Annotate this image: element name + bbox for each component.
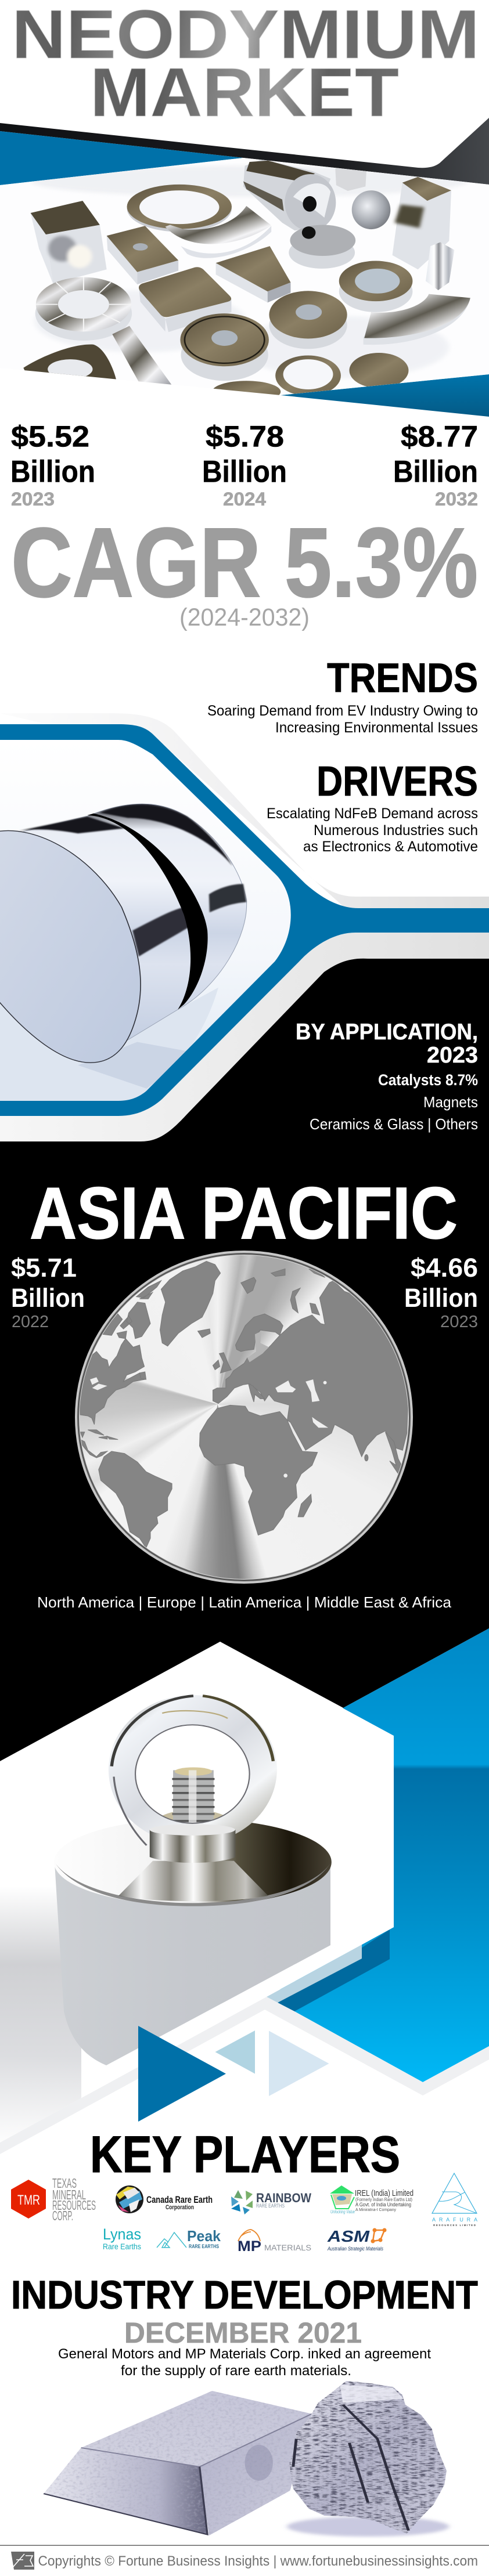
logo: Texas Mineral Resources <box>11 2176 96 2223</box>
collar reflection <box>118 1861 268 1901</box>
stat: 2024: Billion <box>202 455 287 489</box>
logo: Arafura: ARAFURA <box>432 2217 477 2223</box>
logo: Texas Mineral Resources: RESOURCES <box>52 2198 96 2213</box>
date: DECEMBER 2021 <box>124 2317 362 2349</box>
Franz Josef Land <box>271 1269 285 1276</box>
stat: 2024 <box>202 420 287 510</box>
development text: General Motors and MP Materials Corp. inked an agreement <box>58 2346 431 2362</box>
title: MARKET <box>90 54 399 131</box>
trapezoid magnet <box>216 246 290 302</box>
stat: 2024: 2024 <box>223 489 266 510</box>
threaded bolt <box>172 1768 214 1829</box>
blue ribbon <box>0 724 489 1116</box>
dark swoosh band <box>0 118 489 185</box>
big flat ring <box>127 185 232 232</box>
UK and Ireland <box>213 1353 231 1373</box>
logo: Rainbow Rare Earths: RAINBOW <box>256 2191 311 2205</box>
logo: Texas Mineral Resources: TMR <box>17 2192 40 2208</box>
by application text: Catalysts 8.7% <box>378 1071 478 1089</box>
thin ring <box>275 355 341 396</box>
floor shadow <box>0 1886 81 2147</box>
stat: 2022: Billion <box>11 1283 85 1313</box>
flat disc <box>349 353 408 388</box>
title <box>12 0 480 131</box>
other regions: North America | Europe | Latin America | Middle East & Africa <box>37 1594 452 1611</box>
logo: Canada Rare Earth: Corporation <box>166 2204 194 2211</box>
disc with hole <box>289 225 355 269</box>
Italy <box>249 1383 265 1402</box>
drivers text: as Electronics & Automotive <box>303 839 478 855</box>
cylinder magnet photo panel <box>0 740 308 1103</box>
by application text: 2023 <box>427 1043 478 1068</box>
footer logo <box>11 2552 34 2570</box>
by application text: BY APPLICATION, <box>296 1020 478 1045</box>
sphere <box>352 190 390 229</box>
cube magnet <box>31 201 107 284</box>
Novaya Zemlya <box>290 1288 300 1313</box>
eye-bolt magnet photo <box>0 1695 332 2147</box>
top reflective disc <box>54 1819 332 1906</box>
blue wedge bottom-right <box>281 374 489 417</box>
Baltic <box>247 1331 269 1362</box>
logo: Canada Rare Earth <box>116 2185 213 2213</box>
dark blue triangle <box>138 2026 226 2122</box>
logo: MP Materials: MATERIALS <box>264 2243 311 2252</box>
tall block <box>393 177 451 269</box>
front face <box>0 830 141 1063</box>
stat: 2023 <box>10 420 95 510</box>
countersunk ring <box>339 261 412 312</box>
logo: ASM: Australian Strategic Materials <box>327 2246 383 2252</box>
curvy magnet <box>23 345 117 384</box>
logo: IREL India: IREL (India) Limited <box>355 2188 414 2198</box>
base <box>153 1810 234 1842</box>
stat: 2023 region <box>404 1253 478 1331</box>
black section background <box>0 959 489 1761</box>
inland seas <box>90 1377 328 1477</box>
trends text: Soaring Demand from EV Industry Owing to <box>207 703 478 719</box>
logo: Peak: Peak <box>187 2227 221 2245</box>
logo: Texas Mineral Resources: TEXAS <box>52 2176 77 2191</box>
metal ingot and ore photo <box>44 2381 449 2537</box>
by application text: Ceramics & Glass | Others <box>310 1115 478 1133</box>
blue wedge top-left <box>0 131 243 185</box>
white hexagon panel <box>0 1642 394 2143</box>
lower grey ribbon <box>0 933 489 1141</box>
logo: Arafura: RESOURCES LIMITED <box>433 2224 476 2227</box>
logo: Canada Rare Earth: Canada Rare Earth <box>146 2194 213 2205</box>
grooved ring magnet <box>180 313 269 381</box>
Africa <box>200 1405 318 1535</box>
stat: 2023: $5.52 <box>11 420 89 453</box>
development text: for the supply of rare earth materials. <box>121 2363 351 2379</box>
trends text <box>207 656 478 736</box>
continents <box>79 1262 408 1548</box>
stat: 2023: 2023 <box>11 489 55 510</box>
drivers text: Numerous Industries such <box>314 822 478 839</box>
North America <box>79 1339 145 1425</box>
Yamal <box>309 1269 325 1315</box>
logo: Texas Mineral Resources: CORP. <box>52 2208 73 2223</box>
Madagascar <box>298 1494 312 1517</box>
stat: 2022: $5.71 <box>11 1253 77 1282</box>
sector magnet <box>364 294 470 345</box>
back block <box>335 168 366 191</box>
logo: MP Materials <box>238 2230 311 2255</box>
rear band shading <box>100 805 232 866</box>
development text <box>58 2346 431 2379</box>
drivers text: Escalating NdFeB Demand across <box>267 805 478 822</box>
footer rule <box>0 2545 489 2546</box>
stat: 2032 <box>393 420 478 510</box>
Scandinavia <box>236 1314 283 1352</box>
pale blue step <box>267 1945 362 2003</box>
stat: 2022 <box>11 1253 85 1331</box>
logo: Texas Mineral Resources: MINERAL <box>52 2187 86 2202</box>
logo: ASM: ASM <box>327 2227 370 2245</box>
logo: MP Materials: MP <box>238 2238 261 2255</box>
light grey halo around blue ribbon <box>0 713 489 911</box>
stat: 2032: Billion <box>393 455 478 489</box>
Newfoundland <box>139 1372 146 1379</box>
logo: IREL India: Unlocking Value <box>330 2209 355 2214</box>
stat: 2032: 2032 <box>435 489 478 510</box>
logo: Lynas <box>103 2225 141 2251</box>
stat: 2023 region: Billion <box>404 1283 478 1313</box>
rod <box>112 326 171 385</box>
logo: IREL India: A Miniratna-I Company <box>355 2207 396 2212</box>
key players heading: KEY PLAYERS <box>90 2125 400 2183</box>
eye ring <box>109 1695 277 1845</box>
stat: 2023 region: 2023 <box>440 1313 478 1331</box>
Caribbean islands <box>88 1430 118 1440</box>
Svalbard <box>241 1277 256 1294</box>
stat: 2032: $8.77 <box>401 420 478 453</box>
stat: 2023 region: $4.66 <box>411 1253 478 1282</box>
black groove <box>87 814 208 1010</box>
blue geometric background right <box>232 1628 489 2082</box>
logo: Peak: RARE EARTHS <box>189 2243 219 2249</box>
Canadian arctic islands <box>103 1281 161 1339</box>
cylinder with hole <box>243 160 336 231</box>
front band shading <box>19 816 125 833</box>
small tall block <box>426 242 454 290</box>
collar <box>150 1824 235 1863</box>
logo: Rainbow Rare Earths: RARE EARTHS <box>256 2203 285 2209</box>
rounded square magnet <box>139 267 231 332</box>
cylinder body <box>0 804 247 1063</box>
by application text: Magnets <box>423 1093 478 1111</box>
logo: IREL India <box>330 2185 414 2214</box>
by application text <box>296 1020 478 1133</box>
Sri Lanka <box>365 1454 368 1461</box>
trends text: Increasing Environmental Issues <box>275 720 478 736</box>
grey chevron stripes <box>0 1997 489 2154</box>
bottom partial disc <box>212 381 281 403</box>
segmented ring <box>35 277 132 341</box>
pale triangle <box>269 2031 329 2096</box>
logo: Rainbow Rare Earths <box>231 2190 311 2214</box>
logo: Lynas: Lynas <box>103 2225 141 2243</box>
Greenland <box>160 1262 221 1346</box>
metal globe <box>75 1251 413 1584</box>
Central America <box>80 1432 107 1458</box>
logo: IREL India: A Govt. of India Undertaking <box>355 2202 411 2208</box>
logo: Lynas: Rare Earths <box>103 2242 141 2251</box>
logo: Peak <box>157 2227 221 2249</box>
teal triangle <box>215 2031 255 2074</box>
drivers text <box>267 758 478 855</box>
ingot <box>44 2391 312 2535</box>
block with hole <box>107 226 178 284</box>
stat: 2023: Billion <box>10 455 95 489</box>
Eurasia <box>213 1281 408 1457</box>
arc segment <box>166 206 271 244</box>
dark blue step <box>278 1930 390 2011</box>
mid reflection streak <box>132 907 192 956</box>
cylinder body <box>55 1863 330 2065</box>
Southeast Asia <box>386 1432 402 1474</box>
ore rock <box>289 2381 447 2534</box>
logo: IREL India: (Formerly Indian Rare Earths Ltd) <box>355 2197 412 2202</box>
stat: 2024: $5.78 <box>206 420 284 453</box>
CAGR: (2024-2032) <box>179 604 310 631</box>
hero photo: assorted neodymium magnets <box>0 157 489 403</box>
logo: ASM <box>327 2227 387 2252</box>
South America <box>99 1451 172 1548</box>
stat: 2022: 2022 <box>12 1313 49 1331</box>
bronze ring disc <box>269 291 347 349</box>
logo: Arafura <box>432 2173 477 2227</box>
Iceland <box>198 1329 210 1338</box>
